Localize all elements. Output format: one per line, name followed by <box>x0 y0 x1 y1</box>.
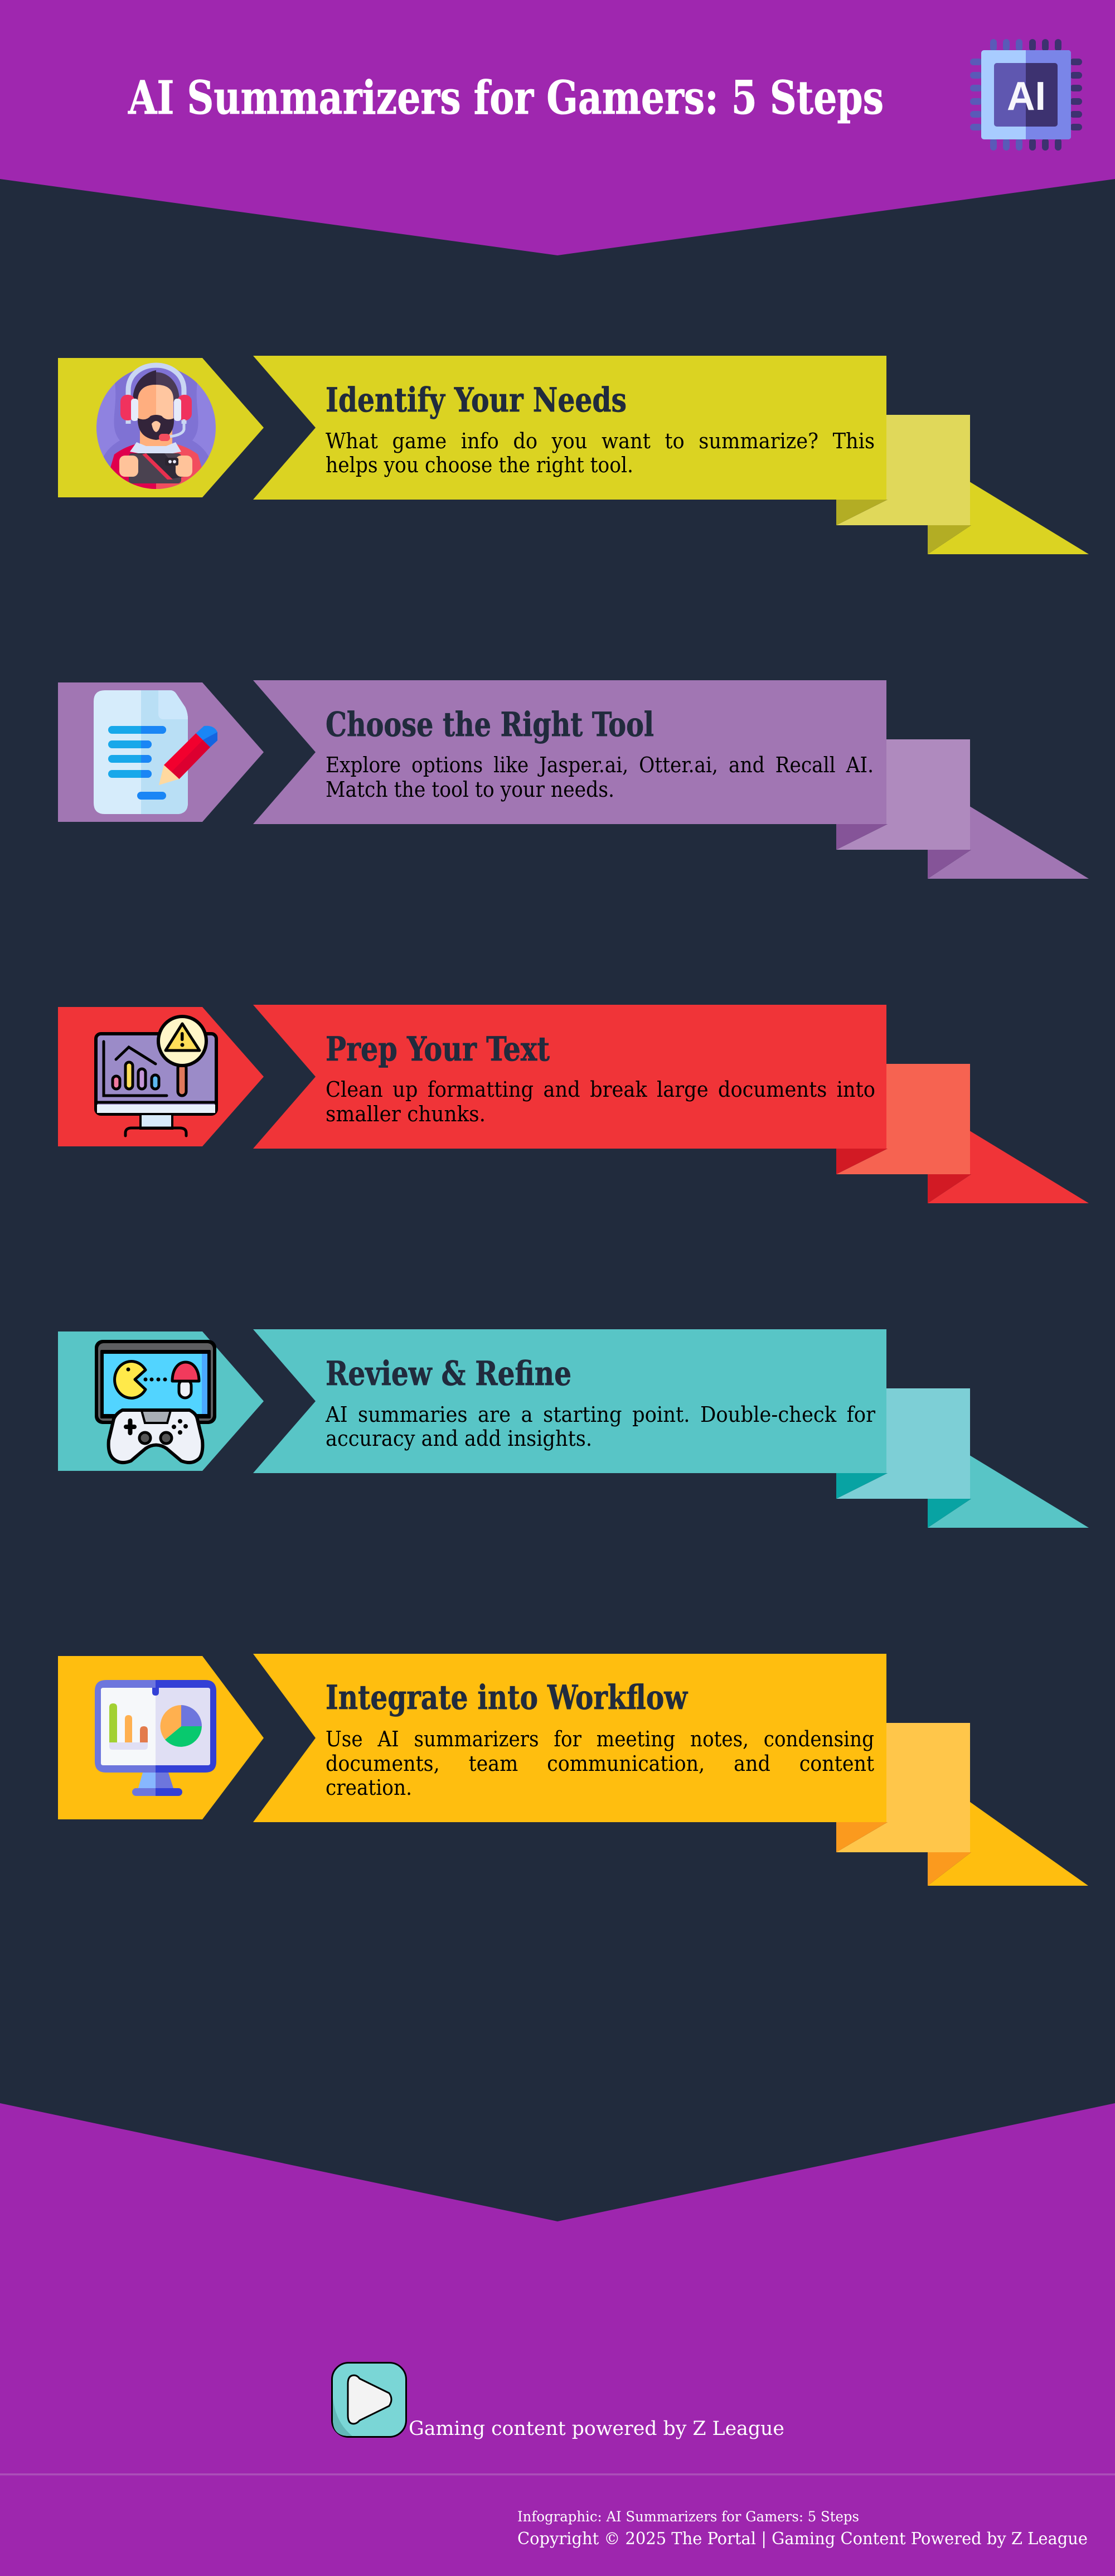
icon panel: step 3 <box>58 1007 264 1146</box>
ribbon: step 5 <box>253 1654 886 1822</box>
icon: document and pencil <box>94 690 217 814</box>
body text: step 4: AI summaries are a starting point. Double-check for <box>325 1402 876 1427</box>
ribbon: step 1 <box>253 356 886 500</box>
mushroom <box>172 1362 199 1398</box>
footer divider <box>0 2473 1115 2476</box>
body text: step 2 <box>326 753 874 802</box>
heading: step 4: Review & Refine <box>326 1354 571 1393</box>
body text: step 5: documents, team communication, and content <box>326 1751 874 1776</box>
ribbon tail: step 3 <box>836 1064 1089 1203</box>
ribbon: step 3 <box>253 1005 886 1149</box>
body text: step 3 <box>326 1077 875 1126</box>
icon: AI chip: AI <box>1007 74 1046 119</box>
step 2: choose the right tool <box>58 680 1089 879</box>
icon panel: step 2 <box>58 682 264 822</box>
body text: step 1 <box>326 429 875 477</box>
body text: step 3: smaller chunks. <box>326 1102 486 1126</box>
icon: monitor with warning magnifier <box>96 1016 216 1136</box>
header banner <box>0 0 1115 255</box>
ribbon tail: step 2 <box>836 739 1089 879</box>
heading: step 5: Integrate into Workflow <box>326 1678 688 1717</box>
pacman <box>115 1362 146 1398</box>
icon panel: step 4 <box>58 1331 264 1471</box>
body text: step 4: accuracy and add insights. <box>326 1426 592 1451</box>
body text: step 5 <box>326 1727 874 1800</box>
caption: gaming content: Gaming content powered by Z League <box>409 2418 784 2440</box>
body text: step 2: Match the tool to your needs. <box>326 777 614 802</box>
title: AI Summarizers for Gamers: 5 Steps <box>128 71 884 125</box>
body text: step 1: helps you choose the right tool. <box>326 453 633 477</box>
icon: presentation monitor <box>95 1680 216 1796</box>
step 3: prep your text <box>58 1005 1089 1203</box>
body text: step 5: Use AI summarizers for meeting notes, condensing <box>326 1727 874 1751</box>
step 1: identify your needs <box>58 356 1089 554</box>
body text: step 4 <box>325 1402 876 1451</box>
controller <box>109 1410 202 1463</box>
icon: gamer with headset <box>96 365 216 491</box>
ribbon: step 2 <box>253 680 886 824</box>
body text: step 1: What game info do you want to summarize? This <box>326 429 875 453</box>
heading: step 3: Prep Your Text <box>326 1030 550 1069</box>
heading: step 2: Choose the Right Tool <box>326 705 654 744</box>
ribbon tail: step 4 <box>836 1388 1089 1528</box>
footer panel <box>0 2103 1115 2576</box>
footer line: copyright: Copyright © 2025 The Portal | Gaming Content Powered by Z League <box>517 2529 1088 2549</box>
icon: play button <box>332 2363 406 2437</box>
icon panel: step 5 <box>58 1656 264 1819</box>
step 4: review and refine <box>58 1329 1089 1528</box>
body text: step 3: Clean up formatting and break large documents into <box>326 1077 875 1102</box>
body text: step 2: Explore options like Jasper.ai, Otter.ai, and Recall AI. <box>326 753 874 777</box>
body text: step 5: creation. <box>326 1775 412 1800</box>
step 5: integrate into workflow <box>58 1654 1088 1886</box>
icon: game console and controller <box>95 1340 216 1463</box>
ribbon tail: step 5 <box>836 1723 1088 1886</box>
ribbon tail: step 1 <box>836 415 1089 554</box>
ribbon: step 4 <box>253 1329 886 1473</box>
heading: step 1: Identify Your Needs <box>326 381 627 420</box>
icon panel: step 1 <box>58 358 264 497</box>
footer line: infographic name: Infographic: AI Summarizers for Gamers: 5 Steps <box>517 2509 859 2525</box>
icon: AI chip <box>970 39 1082 151</box>
